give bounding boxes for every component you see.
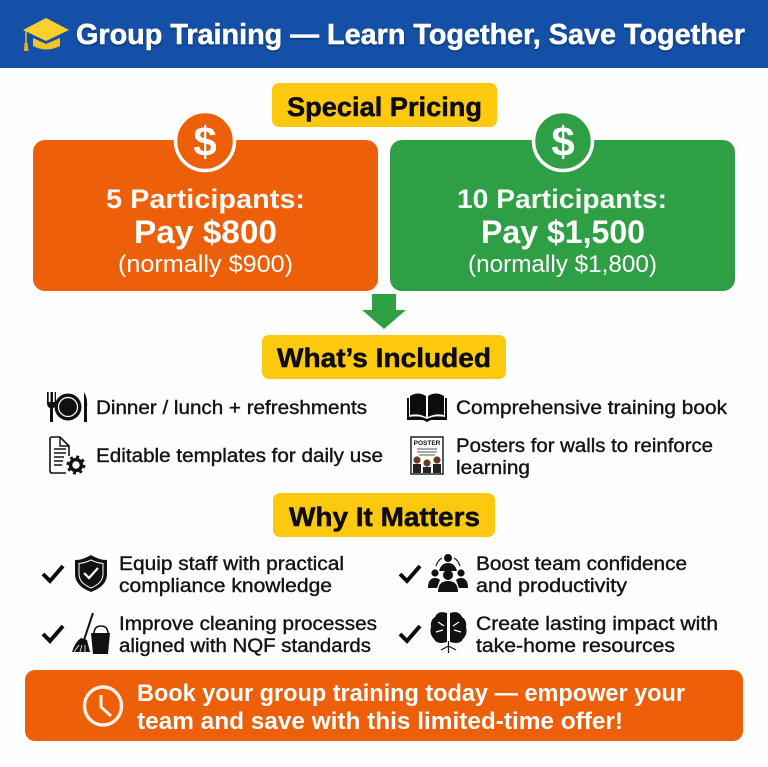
heading: why it matters: Why It Matters <box>289 502 480 532</box>
heading: what's included: What’s Included <box>277 343 491 373</box>
section: included items <box>47 392 727 479</box>
callout: book today <box>25 670 743 741</box>
text: boost team: Boost team confidence <box>476 553 687 575</box>
item: boost team <box>400 553 687 597</box>
panel: 10 participants pricing <box>390 112 735 291</box>
icon: poster <box>411 437 443 474</box>
title: Group Training — Learn Together, Save Together <box>76 19 745 51</box>
item: editable templates <box>50 437 383 473</box>
header banner <box>0 0 768 68</box>
text: improve cleaning: aligned with NQF standards <box>119 635 371 657</box>
heading: special pricing <box>272 83 497 127</box>
icon: open book <box>407 394 447 422</box>
text: posters label: learning <box>456 457 530 479</box>
text: improve cleaning <box>119 613 377 657</box>
icon: orange dollar badge: $ <box>193 118 217 165</box>
text: lasting impact: take-home resources <box>476 635 675 657</box>
text: 5 participants offer: (normally $900) <box>118 251 293 278</box>
text: posters label <box>456 435 713 479</box>
icon: check <box>43 626 63 641</box>
section: why it matters items <box>43 553 718 657</box>
icon: green dollar badge <box>534 112 592 170</box>
text: 10 participants offer: (normally $1,800) <box>468 251 657 278</box>
icon: check <box>43 566 63 581</box>
text: call to action <box>137 680 685 735</box>
text: lasting impact: Create lasting impact with <box>476 613 718 635</box>
icon: team <box>428 554 468 592</box>
item: lasting impact <box>400 612 718 657</box>
text: 10 participants offer <box>457 184 667 278</box>
text: equip staff <box>119 553 344 597</box>
item: improve cleaning <box>43 613 377 657</box>
text: equip staff: Equip staff with practical <box>119 553 344 575</box>
item: dinner: Dinner / lunch + refreshments <box>96 397 367 419</box>
text: 10 participants offer: 10 Participants: <box>457 184 667 214</box>
icon: brain <box>430 612 467 653</box>
panel: 5 participants pricing <box>33 112 378 291</box>
text: improve cleaning: Improve cleaning processes <box>119 613 377 635</box>
item: editable templates: Editable templates for daily use <box>96 445 383 467</box>
icon: plate and cutlery <box>47 392 87 422</box>
icon: check <box>400 566 420 581</box>
item: dinner <box>47 392 367 422</box>
text: posters label: Posters for walls to reinforce <box>456 435 713 457</box>
icon: document with gear <box>50 437 84 473</box>
text: lasting impact <box>476 613 718 657</box>
text: 10 participants offer: Pay $1,500 <box>481 214 645 250</box>
icon: orange dollar badge <box>176 112 234 170</box>
heading: why it matters <box>273 493 495 537</box>
heading: what's included <box>262 335 506 379</box>
text: 5 participants offer: 5 Participants: <box>106 184 305 214</box>
text: 5 participants offer <box>106 184 305 278</box>
item: training book: Comprehensive training book <box>456 397 727 419</box>
item: training book <box>407 394 727 422</box>
item: posters <box>411 435 713 479</box>
text: call to action: Book your group training today — empower your <box>137 680 685 707</box>
text: 5 participants offer: Pay $800 <box>134 214 277 250</box>
arrow: down to included <box>362 294 406 329</box>
text: boost team: and productivity <box>476 575 627 597</box>
text: boost team <box>476 553 687 597</box>
icon: green dollar badge: $ <box>551 118 575 165</box>
text: call to action: team and save with this limited-time offer! <box>137 708 623 735</box>
item: equip staff <box>43 553 344 597</box>
icon: graduation cap <box>23 18 69 51</box>
heading: special pricing: Special Pricing <box>287 92 482 122</box>
icon: shield <box>75 555 107 592</box>
icon: clock <box>84 687 122 725</box>
icon: check <box>400 626 420 641</box>
text: equip staff: compliance knowledge <box>119 575 332 597</box>
icon: poster: POSTER <box>414 440 441 447</box>
icon: broom and bucket <box>72 613 110 654</box>
